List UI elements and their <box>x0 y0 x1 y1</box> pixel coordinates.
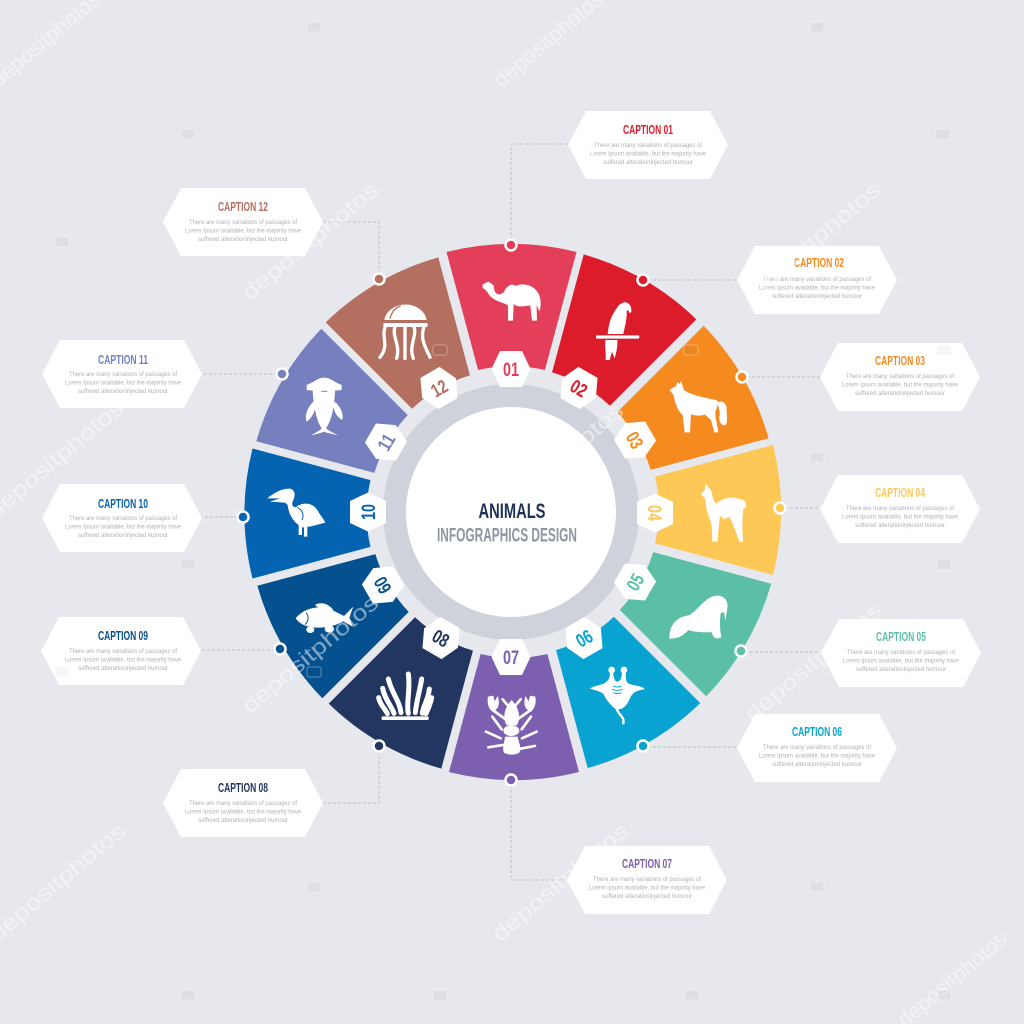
centre title <box>437 500 577 546</box>
dot 01 <box>506 240 516 250</box>
number badge 08 <box>415 613 467 663</box>
caption 11 <box>42 340 202 408</box>
caption 10: CAPTION 10 <box>98 497 148 511</box>
caption 06: Lorem Ipsum available, but the majority have <box>759 754 876 760</box>
wedge 10 <box>244 448 370 578</box>
caption 06: CAPTION 06 <box>792 725 842 739</box>
anchor dots <box>238 240 786 786</box>
caption 04: There are many variations of passages of <box>846 506 954 512</box>
number badge 03: 03 <box>621 429 647 453</box>
dot 12 <box>374 274 384 284</box>
caption 10: suffered alterationinjected humour <box>78 533 168 539</box>
watermark text: depositphotos <box>740 598 886 726</box>
caption 05: There are many variations of passages of <box>847 650 955 656</box>
watermark text: depositphotos <box>739 177 885 305</box>
caption 07: There are many variations of passages of <box>593 877 701 883</box>
icon: lobster <box>486 696 537 755</box>
wedge 06 <box>529 601 704 775</box>
number badge 10 <box>350 492 386 532</box>
caption 05: CAPTION 05 <box>876 630 926 644</box>
centre title: INFOGRAPHICS DESIGN <box>437 526 577 546</box>
icon: sea anemone <box>379 674 432 720</box>
caption 09: suffered alterationinjected humour <box>78 666 168 672</box>
number badge 08: 08 <box>428 626 452 652</box>
dot 06 <box>638 740 648 752</box>
wedge 11 <box>249 325 424 500</box>
caption 08: Lorem Ipsum available, but the majority have <box>185 810 302 816</box>
wedge 09 <box>250 527 425 702</box>
number badge 02: 02 <box>566 376 590 402</box>
icon: walrus <box>669 596 728 639</box>
caption 06: suffered alterationinjected humour <box>772 762 862 768</box>
caption 11: CAPTION 11 <box>98 353 148 367</box>
caption 10 <box>42 484 202 552</box>
dot 03 <box>736 372 748 382</box>
wedge 02 <box>525 247 700 422</box>
number badge 09 <box>358 559 408 611</box>
caption 09: There are many variations of passages of <box>69 649 177 655</box>
number badge 11: 11 <box>374 430 401 455</box>
caption 08 <box>163 769 323 837</box>
caption 04: CAPTION 04 <box>875 486 925 500</box>
number badge 11 <box>361 416 411 468</box>
wedge 07 <box>449 654 579 780</box>
connector 06 <box>643 746 737 748</box>
number badge 01 <box>492 351 530 387</box>
caption 12 <box>163 188 323 256</box>
dot 11 <box>276 368 288 380</box>
connector 08 <box>323 746 379 803</box>
caption 03: CAPTION 03 <box>875 354 925 368</box>
connector 05 <box>740 651 821 653</box>
icon: wolf <box>669 381 727 432</box>
caption 07 <box>567 846 727 914</box>
number badge 04: 04 <box>643 505 664 521</box>
wedge 08 <box>325 601 500 776</box>
watermark text: depositphotos <box>482 398 628 526</box>
number badge 02 <box>553 363 605 413</box>
dot 08 <box>374 740 384 752</box>
caption 08: There are many variations of passages of <box>189 801 297 807</box>
caption 03: suffered alterationinjected humour <box>855 391 945 397</box>
wedge 03 <box>601 322 776 497</box>
connector 01 <box>511 144 568 245</box>
dot 02 <box>638 274 648 286</box>
caption 02: suffered alterationinjected humour <box>772 294 862 300</box>
dot 07 <box>506 774 516 786</box>
caption 03: There are many variations of passages of <box>846 374 954 380</box>
wedge 05 <box>604 525 778 700</box>
caption 07: suffered alterationinjected humour <box>602 894 692 900</box>
caption 11: There are many variations of passages of <box>69 372 177 378</box>
dot 05 <box>736 646 746 656</box>
caption 02 <box>737 246 897 314</box>
caption 04 <box>820 475 980 543</box>
centre title: ANIMALS <box>478 500 546 523</box>
connector 09 <box>201 649 280 651</box>
caption 09 <box>41 617 201 685</box>
connector 02 <box>643 279 737 281</box>
number badge 05: 05 <box>623 570 650 595</box>
number badge 01: 01 <box>503 360 519 381</box>
centre gray ring <box>383 384 639 640</box>
connector 04 <box>780 507 820 509</box>
caption 10: There are many variations of passages of <box>69 516 177 522</box>
number badge 03 <box>610 414 660 466</box>
caption 01 <box>568 111 728 179</box>
icon: llama <box>701 484 746 542</box>
caption 12: There are many variations of passages of <box>189 220 297 226</box>
caption 08: suffered alterationinjected humour <box>198 818 288 824</box>
caption 01: suffered alterationinjected humour <box>603 160 693 166</box>
dot 09 <box>274 644 286 654</box>
wedge 04 <box>655 445 781 575</box>
caption 01: Lorem Ipsum available, but the majority have <box>590 152 707 158</box>
centre white disc <box>406 407 616 617</box>
caption 12: CAPTION 12 <box>218 200 268 214</box>
connector 11 <box>202 373 282 375</box>
number badge 04 <box>637 494 673 532</box>
caption 02: CAPTION 02 <box>794 256 844 270</box>
icon: camel <box>483 282 541 321</box>
connector lines <box>201 144 821 880</box>
caption 08: CAPTION 08 <box>218 781 268 795</box>
icon: jellyfish <box>380 305 430 359</box>
number badge 05 <box>610 556 660 608</box>
dot 04 <box>774 502 786 514</box>
number badge 07: 07 <box>503 648 519 669</box>
number badge 12 <box>413 363 465 413</box>
caption 03 <box>820 343 980 411</box>
connector 03 <box>742 376 820 378</box>
caption 11: Lorem Ipsum available, but the majority have <box>65 380 182 386</box>
caption 09: Lorem Ipsum available, but the majority have <box>65 658 182 664</box>
caption 11: suffered alterationinjected humour <box>78 389 168 395</box>
caption 09: CAPTION 09 <box>98 629 148 643</box>
caption 02: There are many variations of passages of <box>763 277 871 283</box>
watermark text: depositphotos <box>487 818 633 946</box>
caption 12: suffered alterationinjected humour <box>198 237 288 243</box>
caption 04: Lorem Ipsum available, but the majority have <box>842 514 959 520</box>
caption 06: There are many variations of passages of <box>763 745 871 751</box>
number badge 09: 09 <box>369 574 395 598</box>
number badge 06 <box>558 613 610 663</box>
caption 04: suffered alterationinjected humour <box>855 523 945 529</box>
caption 01: CAPTION 01 <box>623 123 673 137</box>
caption 01: There are many variations of passages of <box>594 143 702 149</box>
caption 03: Lorem Ipsum available, but the majority have <box>842 382 959 388</box>
icon: hammerhead shark <box>306 378 343 436</box>
wedge 12 <box>322 250 497 425</box>
dot 10 <box>238 512 248 522</box>
wedge 01 <box>446 244 576 370</box>
icon: fish <box>296 603 353 633</box>
number badge 12: 12 <box>428 376 452 402</box>
number badge 06: 06 <box>573 626 597 652</box>
number badge 10: 10 <box>359 504 380 520</box>
number badge 07 <box>492 639 530 675</box>
caption 02: Lorem Ipsum available, but the majority have <box>759 286 876 292</box>
icon: manta ray <box>590 667 645 723</box>
wheel wedges <box>244 244 781 780</box>
caption 07: Lorem Ipsum available, but the majority have <box>589 886 706 892</box>
connector 12 <box>323 222 379 279</box>
caption 05: Lorem Ipsum available, but the majority have <box>843 658 960 664</box>
caption 10: Lorem Ipsum available, but the majority have <box>65 524 182 530</box>
watermark text: depositphotos <box>237 177 383 305</box>
icon: parrot <box>596 302 639 360</box>
caption 05 <box>821 619 981 687</box>
caption 07: CAPTION 07 <box>622 857 672 871</box>
connector 10 <box>202 516 243 518</box>
connector 07 <box>511 780 567 880</box>
caption 12: Lorem Ipsum available, but the majority have <box>185 228 302 234</box>
icon: pelican <box>267 489 325 537</box>
watermark text: depositphotos <box>237 590 383 718</box>
caption 06 <box>737 714 897 782</box>
caption 05: suffered alterationinjected humour <box>856 667 946 673</box>
